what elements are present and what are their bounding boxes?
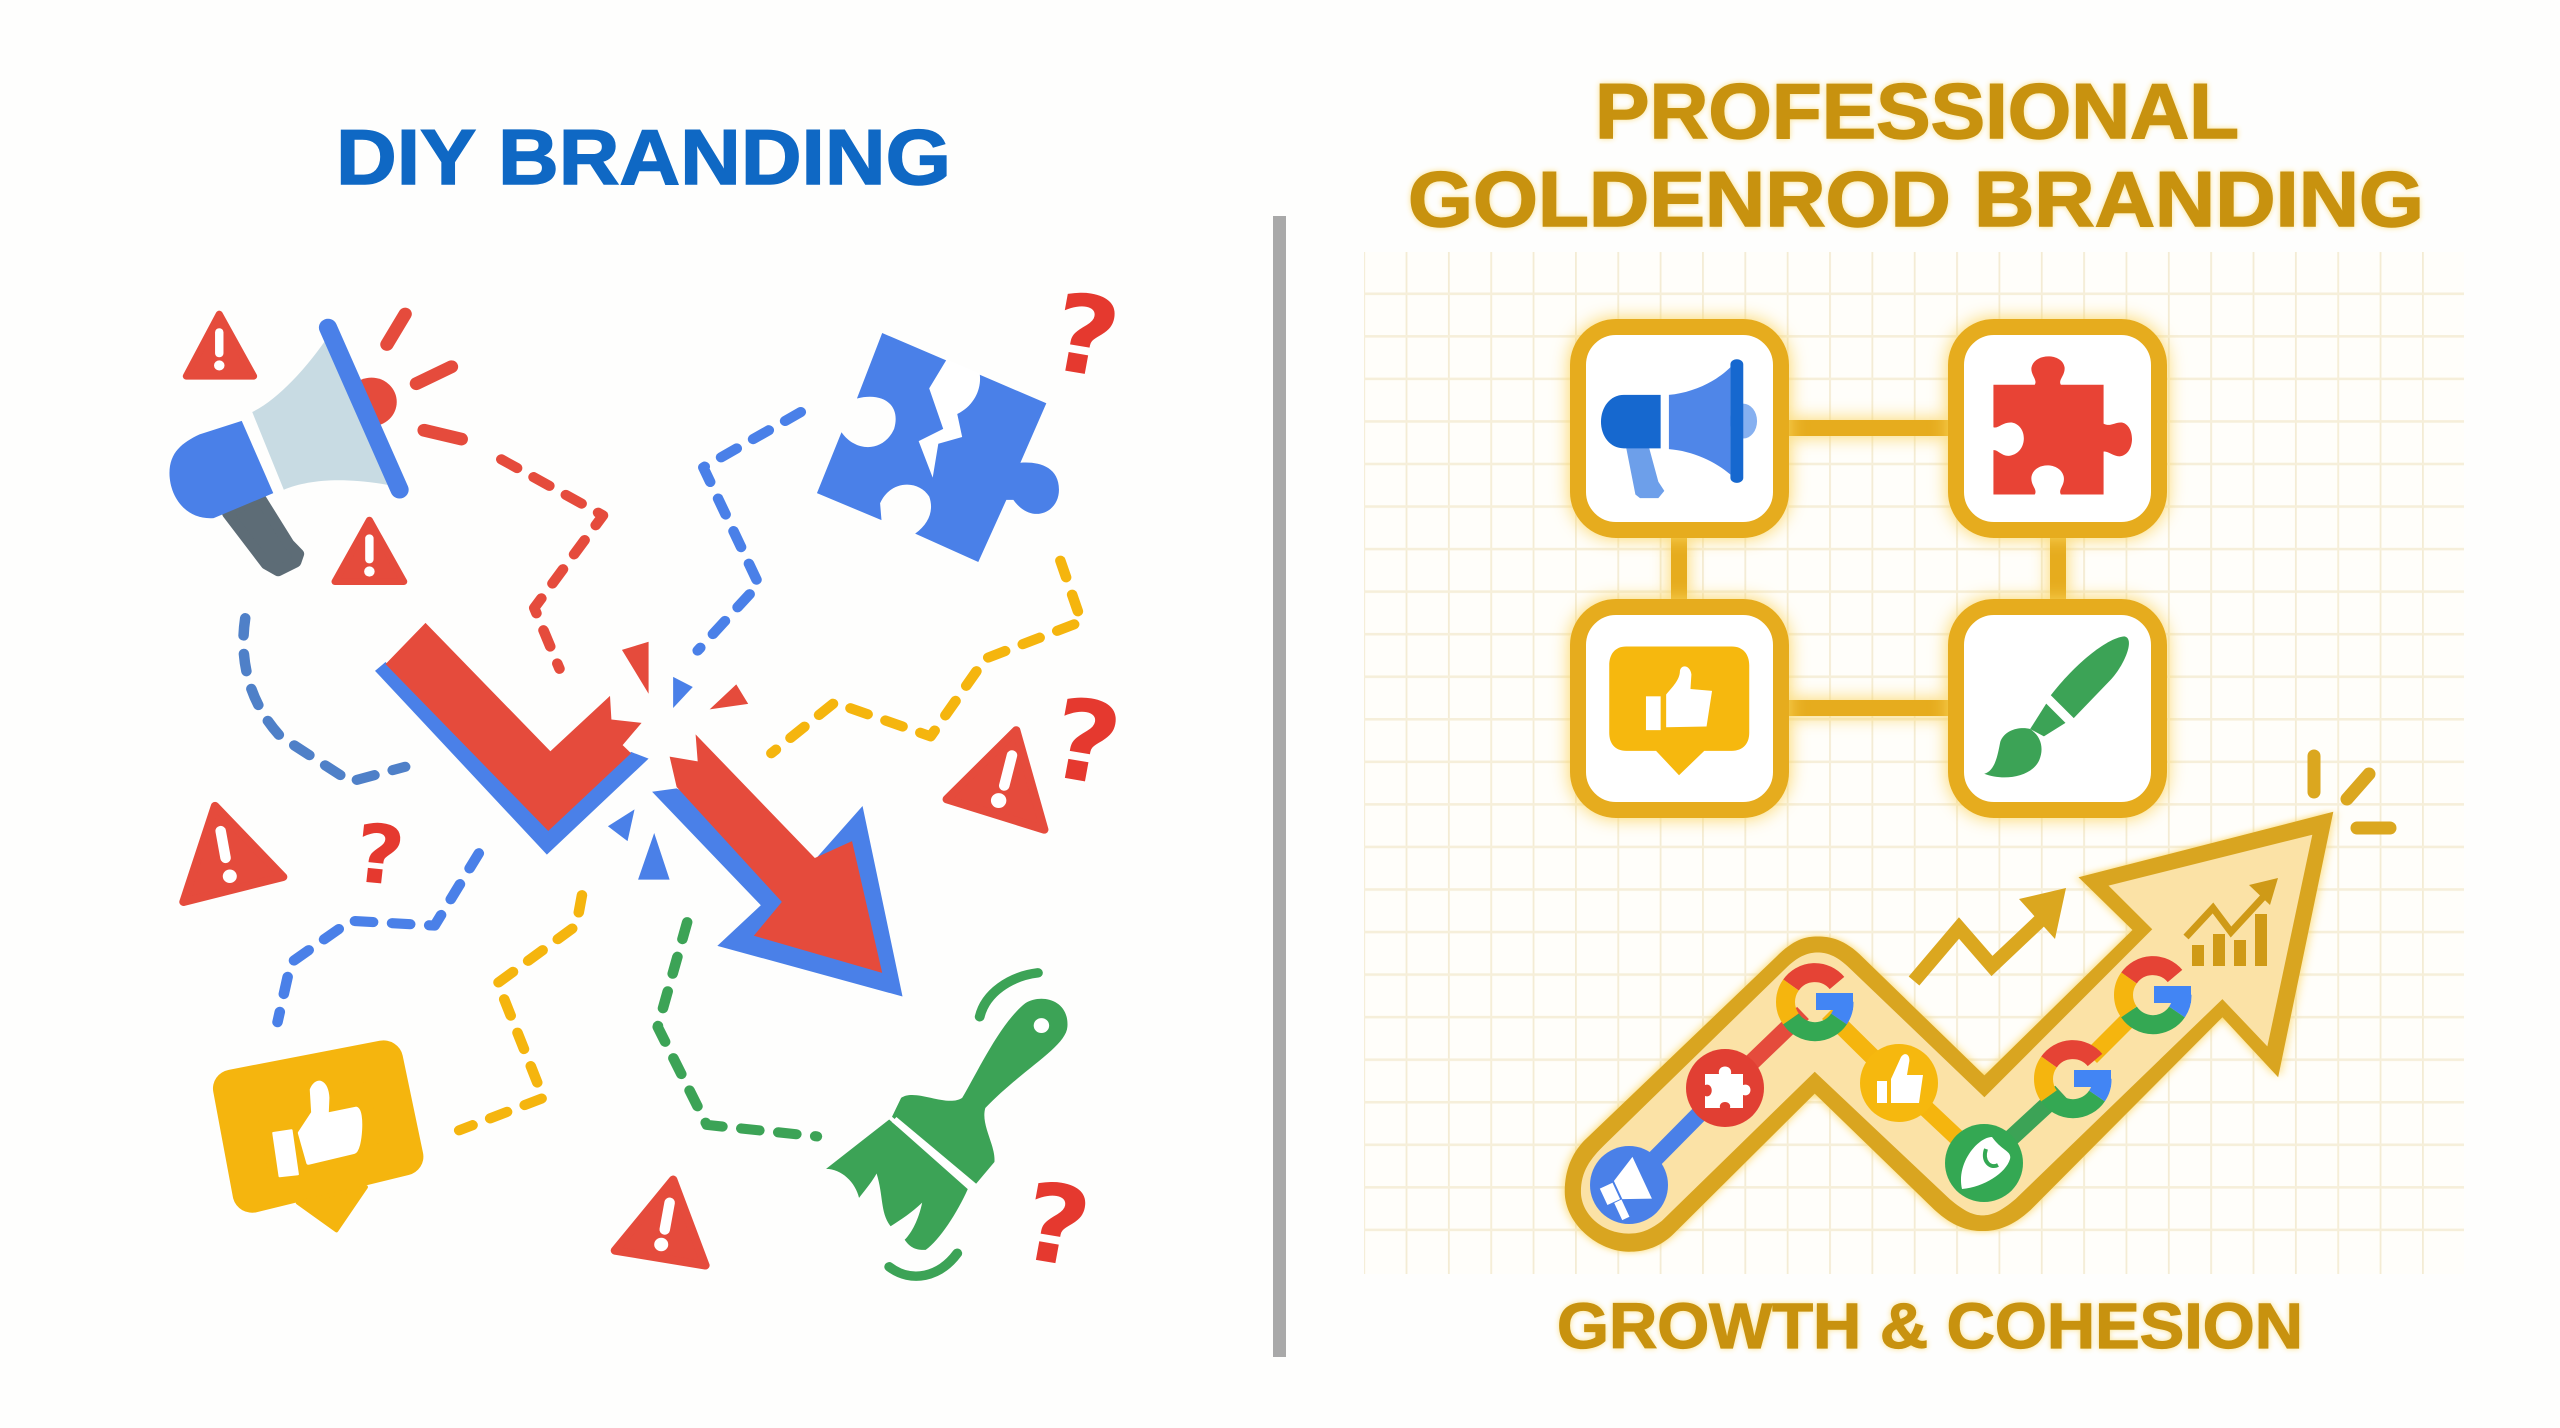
dashed connector: blue to thumbs up	[277, 853, 479, 1022]
node: puzzle	[1686, 1049, 1764, 1127]
title: professional goldenrod branding: PROFESSIONAL	[1595, 67, 2239, 155]
icon: paint brush	[826, 973, 1067, 1276]
icons in boxes	[1601, 356, 2132, 777]
dashed connector: red	[501, 459, 603, 669]
dashed connector: blue curved from megaphone	[243, 618, 405, 782]
divider	[1273, 216, 1286, 1357]
growth arrow with journey	[1565, 756, 2390, 1252]
box: puzzle	[1956, 327, 2159, 530]
journey path links	[1629, 1012, 2136, 1185]
icon: bar chart with trend line	[2186, 878, 2278, 966]
icon: broken puzzle piece	[817, 333, 1059, 562]
node: brush	[1945, 1124, 2023, 1202]
icon: warning triangle 4	[947, 730, 1044, 830]
connectors between boxes	[1679, 428, 2058, 708]
dashed connector: yellow to thumbs up	[459, 895, 582, 1130]
icon: warning triangle 5	[615, 1180, 705, 1265]
icon: warning triangle 1	[186, 314, 254, 376]
panel: DIY branding chaos	[169, 269, 1130, 1293]
dashed connector: green to brush	[658, 922, 817, 1136]
icon: green brush	[1984, 636, 2129, 777]
node: Google G 3	[2123, 966, 2191, 1025]
box: thumbs up	[1578, 607, 1781, 810]
dashed connector: yellow from puzzle	[771, 561, 1081, 753]
icon: blue megaphone	[1601, 359, 1757, 498]
icon: warning triangle 2	[335, 520, 404, 582]
icon: yellow thumbs up	[1609, 647, 1749, 775]
question mark 4: ?	[1012, 1158, 1099, 1293]
box: brush	[1956, 607, 2159, 810]
arrow shards	[608, 642, 748, 880]
icon: broken arrow first segment	[375, 623, 649, 855]
question mark 1: ?	[1042, 269, 1129, 403]
connected icon network	[1578, 327, 2159, 810]
question mark 3: ?	[350, 806, 409, 905]
question mark 2: ?	[1041, 673, 1130, 812]
arrow body	[1565, 812, 2333, 1252]
blueprint grid background	[1364, 252, 2464, 1274]
icon: red puzzle	[1993, 356, 2132, 495]
box: megaphone	[1578, 327, 1781, 530]
icon: warning triangle 3	[183, 806, 283, 902]
node: megaphone	[1590, 1146, 1668, 1224]
node: Google G 1	[1785, 973, 1853, 1032]
icon: thumbs up speech bubble	[233, 1059, 404, 1230]
dashed connector: blue from puzzle	[698, 412, 801, 651]
icon: megaphone	[169, 314, 461, 571]
caption: growth and cohesion: GROWTH & COHESION	[1557, 1290, 2303, 1362]
title: professional goldenrod branding: GOLDENROD BRANDING	[1408, 155, 2424, 243]
node: Google G 2	[2043, 1050, 2111, 1109]
node: thumbs up	[1860, 1044, 1938, 1122]
icon: broken arrow second segment	[652, 734, 903, 997]
sparks	[2314, 756, 2390, 828]
small zigzag arrow	[1914, 888, 2066, 981]
title: DIY branding: DIY BRANDING	[336, 113, 951, 201]
title: professional goldenrod branding	[1408, 67, 2424, 243]
